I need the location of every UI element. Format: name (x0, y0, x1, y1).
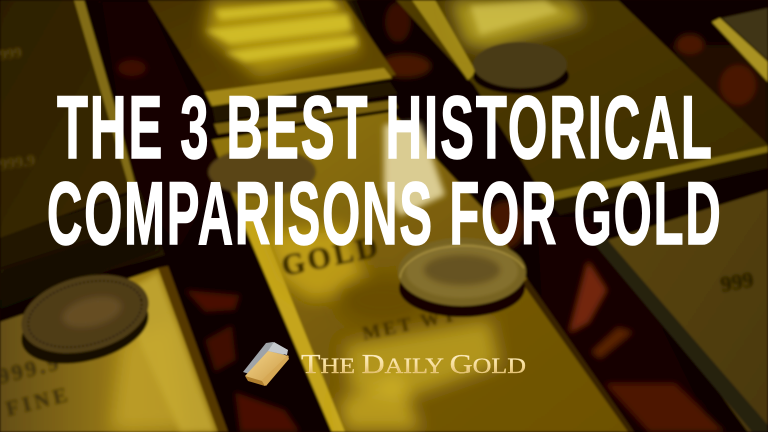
title line 1: THE 3 BEST HISTORICAL (57, 78, 712, 178)
engraved bar markings: 999 (719, 267, 755, 297)
bar: top centre (148, 0, 396, 102)
engraved bar markings: GOLD (279, 230, 384, 283)
bar: bottom left (0, 268, 222, 432)
coin: top right (473, 42, 569, 94)
icon: gold bar (243, 342, 289, 386)
bar: top left (0, 0, 138, 238)
title line 2: COMPARISONS FOR GOLD (47, 165, 721, 264)
title (47, 78, 721, 264)
logo wordmark: THE DAILY GOLD (301, 349, 526, 379)
logo: The Daily Gold (243, 342, 526, 386)
bar: top right (396, 0, 768, 198)
bar: lower right (608, 190, 768, 432)
bar: lower left shadow block (0, 190, 165, 300)
engraved bar markings: FINE (3, 382, 73, 421)
bar: far right (712, 18, 768, 82)
engraved bar markings: MET WT (361, 304, 460, 345)
coin: lower left (13, 262, 157, 376)
coin: centre (398, 238, 526, 317)
bar: centre main (212, 112, 634, 432)
